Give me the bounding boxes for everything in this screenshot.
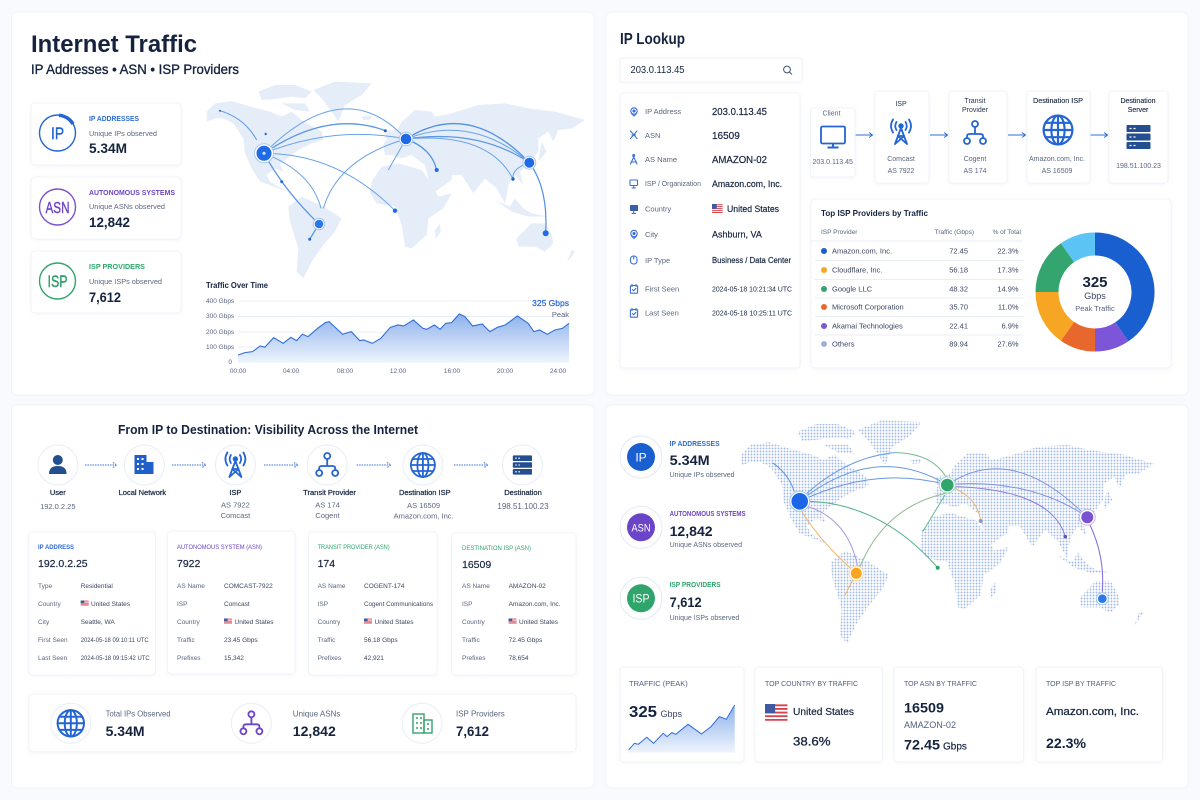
- panel: from IP to destination: [12, 405, 594, 788]
- stat: ISP providers: [402, 703, 505, 743]
- table: Traffic (Gbps): [935, 229, 974, 236]
- panel: IP lookup: [606, 12, 1188, 395]
- card: destination ISP: United States: [519, 619, 559, 626]
- panel: global dot map summary: [606, 405, 1188, 788]
- card: IP address: IP ADDRESS: [38, 544, 75, 551]
- icon: server: [1126, 125, 1150, 149]
- sparkline: [629, 705, 735, 753]
- row: city: [631, 230, 762, 240]
- row: AS name: AMAZON-02: [712, 155, 767, 166]
- stat: ISP providers: 7,612: [670, 594, 702, 610]
- flow: transit provider: [949, 91, 1007, 183]
- card: transit provider: TRANSIT PROVIDER (ASN): [318, 544, 390, 551]
- chart: traffic over time: 16:00: [444, 368, 461, 375]
- stat card: IP addresses: Unique IPs observed: [89, 129, 157, 138]
- card: destination ISP: Amazon.com, Inc.: [509, 601, 561, 608]
- arrow: [454, 462, 488, 468]
- flow: transit provider: AS 174: [964, 168, 987, 175]
- path step: ISP: ISP: [229, 488, 241, 497]
- KPI card: traffic peak: Gbps: [660, 709, 683, 719]
- chart: traffic over time: 200 Gbps: [206, 329, 235, 336]
- dotted world map with traffic arcs: [742, 420, 1154, 644]
- table: Amazon.com, Inc.: [832, 246, 892, 256]
- stat: autonomous systems: AUTONOMOUS SYSTEMS: [670, 511, 746, 518]
- world map with traffic arcs: [207, 82, 585, 278]
- path step: user: 192.0.2.25: [40, 502, 76, 511]
- table: Akamai Technologies: [832, 322, 903, 330]
- card: autonomous system: United States: [234, 619, 274, 626]
- donut chart: [1047, 244, 1143, 340]
- table: 22.41: [949, 322, 968, 330]
- stat card: IP addresses: IP ADDRESSES: [89, 116, 139, 123]
- path step: ISP: AS 7922: [221, 500, 250, 510]
- arrow: [856, 132, 872, 138]
- card: IP address: [29, 532, 155, 675]
- stat card: IP addresses: 5.34M: [89, 141, 127, 156]
- flow: destination ISP: [1027, 91, 1090, 183]
- card: IP address: 2024-05-18 09:15:42 UTC: [81, 655, 150, 662]
- stat: ISP providers: Unique ISPs observed: [670, 615, 739, 622]
- path step: destination: [497, 445, 549, 511]
- card: destination ISP: Country: [462, 619, 486, 626]
- stat: autonomous systems: Unique ASNs observed: [670, 542, 742, 549]
- top ISP providers table and donut: [811, 199, 1171, 368]
- flow: ISP: AS 7922: [888, 168, 915, 175]
- row: IP address: IP Address: [645, 107, 681, 116]
- flow: destination server: [1109, 91, 1168, 183]
- KPI card: top country: TOP COUNTRY BY TRAFFIC: [765, 679, 859, 688]
- row: city: City: [645, 230, 658, 239]
- card: destination ISP: Prefixes: [462, 655, 486, 662]
- chart: traffic over time: Peak: [552, 310, 569, 319]
- chart: traffic over time: 24:00: [550, 368, 567, 375]
- card: IP address: 192.0.2.25: [38, 558, 88, 570]
- card: transit provider: Country: [318, 619, 341, 626]
- table: 11.0%: [998, 302, 1019, 312]
- card: autonomous system: 7922: [177, 558, 201, 570]
- table: [811, 229, 1023, 348]
- flow: destination ISP: Destination ISP: [1033, 98, 1083, 105]
- card: destination ISP: 16509: [462, 559, 491, 571]
- flow: ISP: ISP: [895, 101, 907, 108]
- stat card: ISP providers: [31, 251, 181, 313]
- table: 48.32: [949, 284, 968, 294]
- top ISP providers table and donut: Top ISP Providers by Traffic: [821, 208, 928, 218]
- KPI card: top ASN: AMAZON-02: [904, 720, 956, 730]
- table: Google LLC: [832, 284, 873, 294]
- row: country: United States: [727, 204, 779, 214]
- icon: ASN ring: ASN: [46, 200, 70, 217]
- row: IP type: [630, 256, 791, 265]
- search box: 203.0.113.45: [630, 65, 685, 76]
- KPI card: top country: [755, 667, 882, 762]
- row: first seen: First Seen: [645, 284, 679, 294]
- table: 27.6%: [997, 340, 1019, 348]
- table: 6.9%: [1001, 322, 1019, 330]
- card: destination ISP: 78,654: [509, 655, 529, 662]
- stat: IP addresses: Unique IPs observed: [670, 472, 735, 479]
- KPI card: traffic peak: TRAFFIC (PEAK): [629, 679, 688, 688]
- chart: traffic over time: 20:00: [497, 368, 514, 375]
- icon: tower: [891, 120, 911, 144]
- arrow: [357, 462, 391, 468]
- stat: IP addresses: IP: [635, 450, 647, 464]
- card: destination ISP: ISP: [462, 601, 472, 608]
- KPI card: top ISP: Amazon.com, Inc.: [1046, 706, 1139, 718]
- card: autonomous system: Traffic: [177, 637, 195, 644]
- table: % of Total: [993, 229, 1022, 236]
- card: destination ISP: 72.45 Gbps: [509, 637, 543, 644]
- arrow: [930, 132, 948, 138]
- heading: IP Lookup: [620, 31, 685, 48]
- card: autonomous system: Prefixes: [177, 655, 201, 662]
- KPI card: traffic peak: [620, 667, 744, 762]
- card: transit provider: 174: [318, 558, 335, 570]
- row: ASN: 16509: [712, 131, 740, 142]
- path step: transit provider: AS 174: [315, 500, 340, 510]
- heading: From IP to Destination: Visibility Across the Internet: [118, 423, 419, 437]
- KPI card: top ASN: Gbps: [943, 742, 967, 752]
- flow: destination server: Destination: [1120, 98, 1156, 105]
- lookup details panel: [620, 93, 800, 368]
- stat card: autonomous systems: [31, 177, 181, 239]
- card: IP address: Country: [38, 601, 62, 608]
- flow: destination server: 198.51.100.23: [1116, 163, 1161, 170]
- card: autonomous system: ISP: [177, 601, 187, 608]
- stat: autonomous systems: ASN: [632, 522, 651, 534]
- stat: total IPs: Total IPs Observed: [106, 710, 171, 718]
- path step: destination ISP: Amazon.com, Inc.: [394, 512, 454, 520]
- flow: client: 203.0.113.45: [813, 159, 853, 166]
- icon: user: [49, 455, 67, 474]
- table: 35.70: [949, 302, 968, 312]
- card: IP address: City: [38, 619, 50, 626]
- flow: transit provider: Cogent: [964, 156, 986, 163]
- subtitle: IP Addresses • ASN • ISP Providers: [31, 62, 239, 77]
- arrow: [1008, 132, 1026, 138]
- card: destination ISP: AMAZON-02: [509, 583, 546, 590]
- icon: ISP ring: [40, 263, 76, 299]
- chart: traffic over time: 400 Gbps: [206, 298, 235, 305]
- icon: ASN ring: [40, 189, 76, 225]
- card: autonomous system: Country: [177, 619, 201, 626]
- flow: destination ISP: AS 16509: [1042, 168, 1072, 175]
- path step: transit provider: [303, 445, 356, 520]
- card: autonomous system: AUTONOMOUS SYSTEM (ASN): [177, 544, 262, 551]
- path step: transit provider: Cogent: [315, 511, 341, 520]
- KPI card: top country: 38.6%: [793, 734, 831, 748]
- flow: transit provider: Provider: [962, 107, 989, 114]
- path step: destination ISP: AS 16509: [407, 501, 440, 510]
- flow: ISP: [875, 91, 929, 183]
- card: autonomous system: COMCAST-7922: [224, 583, 273, 590]
- path step: destination: 198.51.100.23: [497, 502, 549, 511]
- table: 14.9%: [997, 284, 1019, 294]
- panel: internet traffic overview: [12, 12, 594, 395]
- row: last seen: [630, 308, 793, 318]
- icon: server: [513, 455, 532, 475]
- chart: traffic over time: 100 Gbps: [206, 344, 235, 351]
- card: autonomous system: Comcast: [224, 601, 250, 608]
- icon: network: [316, 453, 338, 476]
- chart: traffic over time: Traffic Over Time: [206, 281, 269, 290]
- stat: unique ASNs: [231, 703, 340, 743]
- flow: destination server: Server: [1128, 107, 1149, 114]
- icon: globe: [411, 453, 435, 477]
- card: autonomous system: [168, 531, 295, 674]
- icon: IP ring: IP: [51, 124, 64, 143]
- icon: network: [964, 121, 986, 144]
- flow: destination ISP: Amazon.com, Inc.: [1029, 156, 1085, 163]
- KPI card: top ISP: 22.3%: [1046, 736, 1086, 751]
- KPI card: top ASN: [894, 667, 1024, 762]
- stat: ISP providers: ISP Providers: [456, 710, 505, 718]
- path step: destination ISP: [394, 445, 454, 520]
- icon: tower: [225, 452, 245, 477]
- stat: IP addresses: 5.34M: [670, 452, 710, 468]
- card: destination ISP: [452, 533, 576, 675]
- table: Cloudflare, Inc.: [832, 266, 882, 274]
- row: ASN: [630, 131, 740, 142]
- card: autonomous system: 23.45 Gbps: [224, 637, 258, 644]
- card: transit provider: 56.18 Gbps: [364, 637, 398, 644]
- stat: unique ASNs: 12,842: [293, 723, 336, 739]
- stat card: autonomous systems: AUTONOMOUS SYSTEMS: [89, 190, 175, 197]
- table: 17.3%: [997, 266, 1019, 274]
- stat: ISP providers: ISP: [632, 592, 650, 606]
- arrow: [1091, 132, 1108, 138]
- title: Internet Traffic: [31, 31, 197, 58]
- chart: traffic over time: 325 Gbps: [532, 298, 569, 308]
- chart: traffic over time: 300 Gbps: [206, 313, 235, 320]
- card: autonomous system: AS Name: [177, 583, 205, 590]
- row: ASN: ASN: [645, 131, 660, 140]
- chart: traffic over time: 04:00: [283, 368, 300, 375]
- row: first seen: [630, 284, 793, 294]
- path step: local network: [119, 445, 166, 497]
- card: transit provider: Prefixes: [318, 655, 342, 662]
- stat card: autonomous systems: 12,842: [89, 215, 130, 230]
- flow: client: [810, 108, 855, 177]
- card: IP address: Type: [38, 583, 52, 590]
- card: IP address: Seattle, WA: [81, 619, 115, 626]
- summary bar: [29, 694, 576, 752]
- card: destination ISP: Traffic: [462, 637, 480, 644]
- card: transit provider: Cogent Communications: [364, 601, 434, 608]
- row: last seen: Last Seen: [645, 308, 679, 318]
- flow: transit provider: Transit: [964, 98, 986, 105]
- icon: building: [134, 455, 154, 474]
- path step: user: User: [50, 488, 66, 497]
- table: Others: [832, 340, 855, 348]
- card: transit provider: AS Name: [318, 583, 346, 590]
- row: IP type: IP Type: [645, 256, 670, 265]
- stat: autonomous systems: 12,842: [670, 523, 713, 539]
- card: IP address: United States: [91, 601, 131, 608]
- path step: ISP: [215, 445, 255, 520]
- card: transit provider: Traffic: [318, 637, 336, 644]
- stat card: IP addresses: [31, 103, 181, 165]
- chart: traffic over time: 08:00: [337, 368, 354, 375]
- card: transit provider: [308, 532, 437, 675]
- row: IP address: 203.0.113.45: [712, 107, 767, 118]
- row: ISP organization: [630, 179, 782, 189]
- card: IP address: 2024-05-18 09:10:11 UTC: [81, 637, 149, 644]
- row: first seen: 2024-05-18 10:21:34 UTC: [712, 284, 793, 294]
- table: Microsoft Corporation: [832, 302, 904, 312]
- path step: destination ISP: Destination ISP: [399, 488, 451, 497]
- row: ISP organization: ISP / Organization: [645, 179, 701, 188]
- path step: ISP: Comcast: [221, 511, 251, 520]
- stat: total IPs: 5.34M: [106, 723, 145, 739]
- row: AS name: AS Name: [645, 155, 677, 164]
- KPI card: top ASN: 16509: [904, 700, 944, 716]
- chart: traffic over time: 12:00: [390, 368, 407, 375]
- KPI card: top country: United States: [793, 707, 854, 718]
- icon: US flag: [765, 704, 788, 721]
- chart: traffic over time: [206, 281, 569, 375]
- flow: ISP: Comcast: [887, 156, 915, 163]
- row: country: [630, 204, 779, 214]
- KPI card: top ASN: TOP ASN BY TRAFFIC: [904, 679, 978, 688]
- KPI card: traffic peak: 325: [629, 704, 657, 721]
- path step: transit provider: Transit Provider: [303, 488, 356, 497]
- stat card: ISP providers: Unique ISPs observed: [89, 277, 162, 286]
- icon: monitor: [821, 126, 845, 148]
- icon: IP ring: [40, 115, 76, 151]
- stat card: ISP providers: ISP PROVIDERS: [89, 264, 145, 271]
- row: country: Country: [645, 204, 672, 214]
- card: IP address: Residential: [81, 583, 113, 590]
- table: 56.18: [949, 266, 968, 274]
- card: destination ISP: AS Name: [462, 583, 490, 590]
- search box: [620, 58, 802, 82]
- table: 22.3%: [997, 246, 1019, 256]
- stat: unique ASNs: Unique ASNs: [293, 710, 340, 718]
- flow: client: Client: [823, 110, 840, 118]
- path step: destination: Destination: [504, 488, 542, 497]
- icon: globe: [1044, 116, 1072, 144]
- KPI card: top ASN: 72.45: [904, 736, 940, 752]
- icon: ISP ring: ISP: [48, 272, 68, 291]
- arrow: [264, 462, 298, 468]
- chart: traffic over time: 00:00: [230, 368, 247, 375]
- card: IP address: Last Seen: [38, 655, 68, 662]
- KPI card: top ISP: TOP ISP BY TRAFFIC: [1046, 679, 1117, 688]
- donut chart: Peak Traffic: [1075, 304, 1115, 313]
- stat: IP addresses: [620, 436, 735, 479]
- KPI card: top ISP: [1036, 667, 1163, 762]
- table: ISP Provider: [821, 229, 858, 236]
- arrow: [85, 462, 117, 468]
- stat: IP addresses: IP ADDRESSES: [670, 441, 720, 448]
- path step: user: [38, 445, 78, 511]
- card: transit provider: ISP: [318, 601, 328, 608]
- card: transit provider: 42,921: [364, 655, 384, 662]
- arrow: [172, 462, 206, 468]
- card: transit provider: United States: [374, 619, 414, 626]
- row: IP type: Business / Data Center: [712, 256, 791, 265]
- stat: total IPs: [51, 703, 171, 743]
- card: destination ISP: DESTINATION ISP (ASN): [462, 545, 531, 552]
- stat: ISP providers: [620, 577, 739, 622]
- table: 89.94: [949, 340, 968, 348]
- donut chart: Gbps: [1084, 291, 1106, 301]
- card: IP address: First Seen: [38, 637, 68, 644]
- card: autonomous system: 15,342: [224, 655, 244, 662]
- row: last seen: 2024-05-18 10:25:11 UTC: [712, 308, 793, 318]
- table: 72.45: [949, 246, 968, 256]
- path step: local network: Local Network: [119, 488, 166, 497]
- stat card: ISP providers: 7,612: [89, 290, 121, 305]
- stat: ISP providers: ISP PROVIDERS: [670, 582, 721, 589]
- row: AS name: [630, 154, 767, 166]
- card: transit provider: COGENT-174: [364, 583, 405, 590]
- row: ISP organization: Amazon.com, Inc.: [712, 179, 782, 189]
- row: city: Ashburn, VA: [712, 230, 762, 240]
- donut chart: 325: [1082, 274, 1108, 291]
- stat: ISP providers: 7,612: [456, 723, 489, 739]
- chart: traffic over time: 0: [228, 359, 232, 366]
- stat: autonomous systems: [620, 506, 746, 549]
- stat card: autonomous systems: Unique ASNs observed: [89, 202, 165, 211]
- row: IP address: [631, 107, 767, 118]
